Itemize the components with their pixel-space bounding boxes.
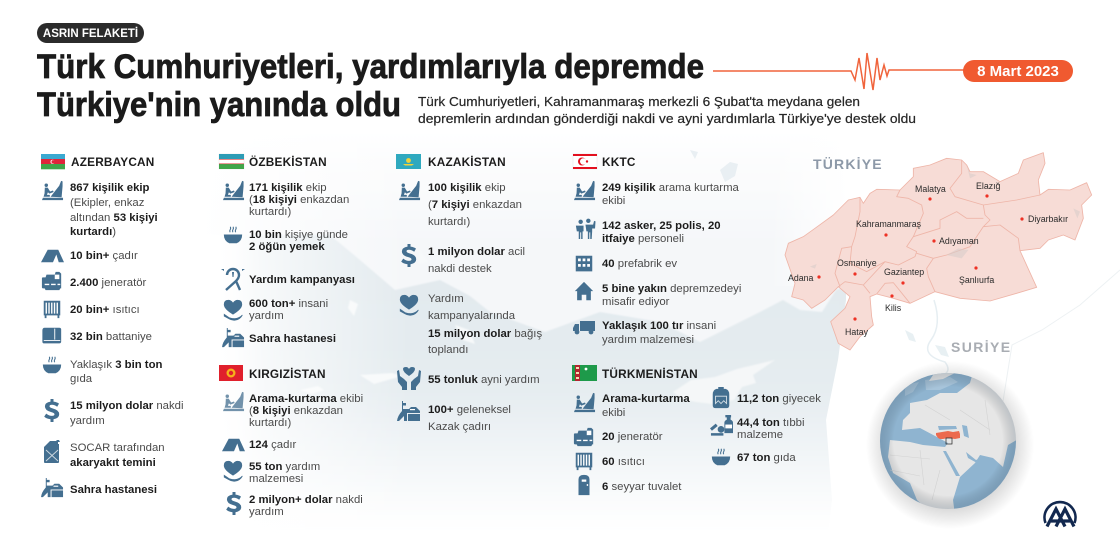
locator globe — [870, 366, 1030, 524]
item: nakdi yardım: 15 milyon dolar nakdi — [70, 400, 184, 412]
item: prefabrik ev — [576, 256, 677, 271]
item: gıda — [43, 357, 163, 385]
item: ayni yardım: 55 tonluk ayni yardım — [428, 374, 540, 386]
panel: Türkmenistan — [572, 365, 821, 495]
item: gıda — [712, 449, 796, 465]
item: ekip — [574, 393, 690, 419]
province names: Diyarbakır — [1028, 214, 1068, 224]
item: seyyar tuvalet: 6 seyyar tuvalet — [602, 481, 682, 493]
item: tır: yardım malzemesi — [602, 334, 694, 346]
item: ısıtıcı: 20 bin+ ısıtıcı — [70, 304, 140, 316]
item: ısıtıcı: 60 ısıtıcı — [602, 456, 645, 468]
subtitle: Türk Cumhuriyetleri, Kahramanmaraş merkezli 6 Şubat'ta meydana gelen — [418, 95, 860, 109]
item: gıda: Yaklaşık 3 bin ton — [70, 359, 163, 371]
item: tıbbi malzeme — [710, 415, 804, 441]
flag: Azerbaycan — [41, 154, 65, 169]
item: seyyar tuvalet — [578, 475, 682, 495]
item: yardım malzemesi — [224, 461, 320, 485]
item: ekip: (8 kişiyi enkazdan — [249, 405, 343, 417]
item: bağış: toplandı — [428, 344, 468, 356]
province names — [788, 181, 1068, 337]
item: personel: 142 asker, 25 polis, 20 — [602, 220, 721, 232]
Turkey highlight — [936, 431, 960, 439]
item: ekip: (7 kişiyi enkazdan — [428, 199, 522, 211]
item: tır — [573, 320, 716, 346]
item: nakdi yardım — [44, 399, 184, 427]
title — [37, 48, 704, 124]
item: yemek: 2 öğün yemek — [249, 241, 325, 253]
heading: Özbekistan: ÖZBEKİSTAN — [249, 155, 327, 169]
item: ısıtıcı — [44, 301, 140, 318]
item: ekip — [399, 181, 522, 228]
province names: Malatya — [915, 184, 946, 194]
item: insani yardım — [224, 298, 328, 322]
item: jeneratör — [574, 428, 663, 446]
item: ekip: (Ekipler, enkaz — [70, 197, 145, 209]
item: ekip — [223, 181, 349, 218]
item: sahra hastanesi: Sahra hastanesi — [249, 333, 336, 345]
item: sahra hastanesi — [222, 328, 336, 347]
item: personel — [576, 219, 721, 245]
item: ekip: 249 kişilik arama kurtarma — [602, 182, 740, 194]
flag: Türkmenistan — [572, 365, 597, 381]
item: nakdi destek: 1 milyon dolar acil — [428, 246, 525, 258]
item: bağış: Yardım — [428, 293, 464, 305]
item: yemek: 10 bin kişiye günde — [249, 229, 348, 241]
province names: Adana — [788, 273, 814, 283]
tag: ASRIN FELAKETİ: ASRIN FELAKETİ — [43, 27, 138, 40]
panel: Kazakistan — [396, 154, 542, 433]
item: bağış: 15 milyon dolar bağış — [428, 328, 542, 340]
item: ekip: 171 kişilik ekip — [249, 182, 327, 194]
item: ekip — [42, 181, 158, 238]
item: ekip: Arama-kurtarma — [602, 393, 690, 405]
panel: Azerbaycan — [41, 154, 184, 497]
item: sahra hastanesi — [41, 478, 157, 497]
item: çadır — [222, 439, 297, 452]
item: misafir: misafir ediyor — [602, 296, 670, 308]
item: ekip: 867 kişilik ekip — [70, 182, 150, 194]
item: yemek — [224, 227, 348, 253]
heading: KKTC: KKTC — [602, 155, 636, 169]
item: insani yardım: 600 ton+ insani — [249, 298, 328, 310]
item: tır: Yaklaşık 100 tır insani — [602, 320, 716, 332]
item: nakdi destek — [401, 244, 525, 275]
flag: Özbekistan — [219, 154, 244, 169]
flag: Kırgızistan — [219, 365, 243, 381]
item: akaryakıt: SOCAR tarafından — [70, 442, 165, 454]
background map — [170, 100, 1120, 550]
province names: Kahramanmaraş — [856, 219, 922, 229]
item: gıda: gıda — [70, 373, 93, 385]
item: jeneratör: 20 jeneratör — [602, 431, 663, 443]
item: misafir — [575, 282, 741, 308]
province names: Hatay — [845, 327, 869, 337]
item: tıbbi malzeme: malzeme — [737, 429, 783, 441]
province names: Elazığ — [976, 181, 1001, 191]
item: ekip — [574, 181, 740, 207]
panel: Kırgızistan — [219, 365, 363, 518]
map: earthquake provinces — [785, 153, 1092, 350]
province names: Gaziantep — [884, 267, 924, 277]
item: nakdi destek: nakdi destek — [428, 263, 492, 275]
subtitle — [418, 95, 916, 126]
label: Türkiye: TÜRKİYE — [813, 156, 883, 172]
item: yardım malzemesi: malzemesi — [249, 473, 303, 485]
item: gıda: 67 ton gıda — [737, 452, 796, 464]
item: çadır: 10 bin+ çadır — [70, 250, 138, 262]
item: battaniye — [42, 328, 152, 343]
item: tıbbi malzeme: 44,4 ton tıbbi — [737, 417, 804, 429]
heading: Azerbaycan: AZERBAYCAN — [71, 155, 154, 169]
item: çadır: 124 çadır — [249, 439, 297, 451]
date badge — [963, 60, 1073, 82]
item: insani yardım: yardım — [249, 310, 284, 322]
province names: Osmaniye — [837, 258, 877, 268]
province dots — [817, 194, 1024, 321]
item: ısıtıcı — [576, 453, 645, 470]
province names: Şanlıurfa — [959, 275, 994, 285]
item: ekip: 100 kişilik ekip — [428, 182, 506, 194]
item: ekip: kurtardı) — [249, 206, 291, 218]
item: yardım malzemesi: 55 ton yardım — [249, 461, 320, 473]
item: ekip: ekibi — [602, 407, 625, 419]
item: nakdi yardım: 2 milyon+ dolar nakdi — [249, 494, 363, 506]
item: ekip: Arama-kurtarma ekibi — [249, 393, 363, 405]
item: battaniye: 32 bin battaniye — [70, 331, 152, 343]
item: kampanya — [221, 269, 355, 290]
heading: Türkmenistan: TÜRKMENİSTAN — [602, 367, 698, 381]
item: ekip: kurtardı) — [428, 216, 470, 228]
item: sahra hastanesi: Sahra hastanesi — [70, 484, 157, 496]
province names: Adıyaman — [939, 236, 979, 246]
item: bağış — [400, 293, 542, 356]
item: ayni yardım — [397, 367, 540, 390]
tag: ASRIN FELAKETİ — [37, 23, 144, 43]
item: ekip: kurtardı) — [249, 417, 291, 429]
heading: Kırgızistan: KIRGIZİSTAN — [249, 367, 326, 381]
item: misafir: 5 bine yakın depremzedeyi — [602, 283, 741, 295]
logo: AA — [1044, 502, 1076, 526]
date badge: 8 Mart 2023 — [977, 63, 1059, 80]
item: ekip: altından 53 kişiyi — [70, 212, 158, 224]
item: Kazak çadırı — [397, 401, 511, 433]
province names: Kilis — [885, 303, 902, 313]
item: kampanya: Yardım kampanyası — [249, 274, 355, 286]
seismograph line — [713, 53, 965, 90]
item: Kazak çadırı: 100+ geleneksel — [428, 404, 511, 416]
item: personel: itfaiye personeli — [602, 233, 684, 245]
panel: Özbekistan — [219, 154, 355, 347]
item: jeneratör — [42, 272, 147, 290]
item: çadır — [41, 250, 138, 263]
item: ekip: ekibi — [602, 195, 625, 207]
item: akaryakıt: akaryakıt temini — [70, 457, 156, 469]
item: nakdi yardım — [226, 492, 363, 518]
item: ekip: kurtardı) — [70, 226, 116, 238]
item: giyecek: 11,2 ton giyecek — [737, 393, 821, 405]
item: akaryakıt — [44, 440, 165, 469]
item: giyecek — [713, 387, 821, 408]
flag: Kazakistan — [396, 154, 421, 169]
item: prefabrik ev: 40 prefabrik ev — [602, 258, 677, 270]
label: Suriye: SURİYE — [951, 339, 1012, 355]
item: ekip — [223, 392, 363, 429]
item: nakdi yardım: yardım — [249, 506, 284, 518]
title: Türkiye'nin yanında oldu — [37, 86, 401, 124]
panel: KKTC — [573, 154, 741, 346]
item: Kazak çadırı: Kazak çadırı — [428, 421, 491, 433]
item: nakdi yardım: yardım — [70, 415, 105, 427]
title: Türk Cumhuriyetleri, yardımlarıyla depremde — [37, 48, 704, 86]
item: jeneratör: 2.400 jeneratör — [70, 277, 147, 289]
heading: Kazakistan: KAZAKİSTAN — [428, 155, 506, 169]
item: bağış: kampanyalarında — [428, 310, 516, 322]
flag: KKTC — [573, 154, 597, 169]
item: ekip: (18 kişiyi enkazdan — [249, 194, 349, 206]
subtitle: depremlerin ardından gönderdiği nakdi ve ayni yardımlarla Türkiye'ye destek oldu — [418, 112, 916, 126]
